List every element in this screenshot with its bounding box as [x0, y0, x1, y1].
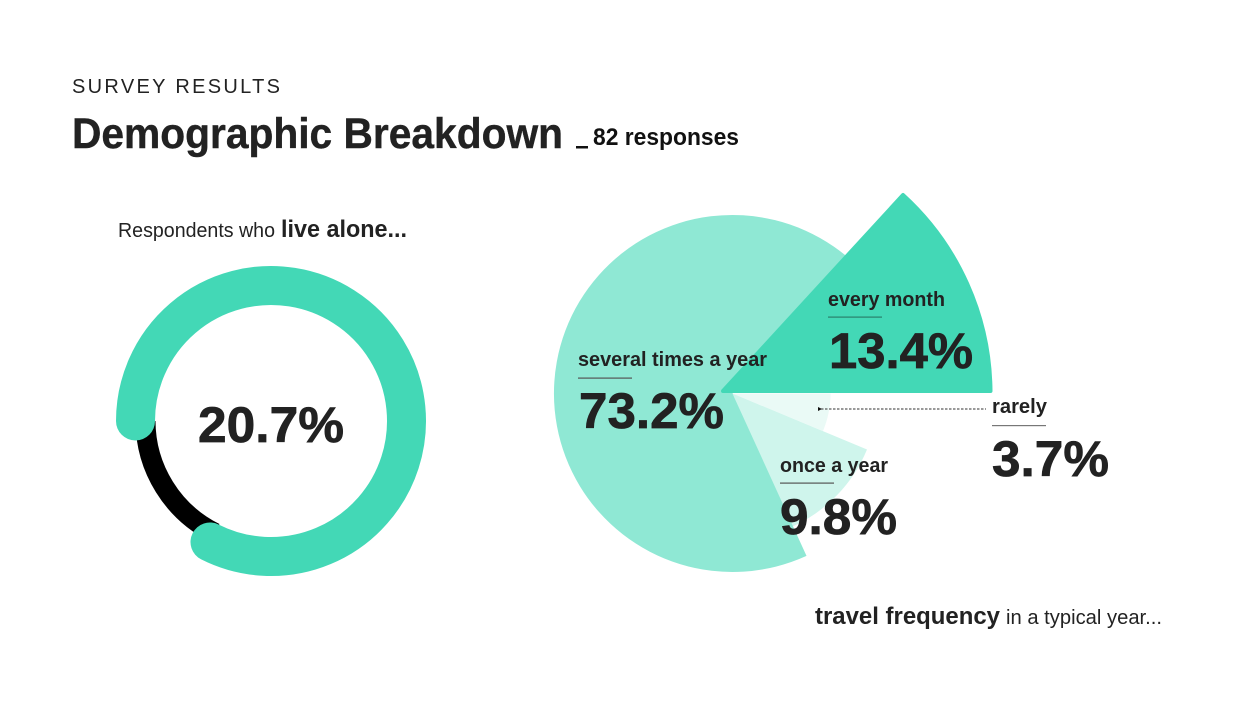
slice: every month — [723, 195, 990, 391]
label: rarely — [992, 396, 1109, 487]
response count: 82 responses — [593, 124, 739, 151]
label: several times a year: several times a year — [578, 349, 767, 371]
donut chart: live alone — [136, 286, 406, 557]
label: every month: every month — [828, 289, 945, 311]
caption: travel frequency: travel frequency — [815, 603, 1001, 630]
label: several times a year: 73.2% — [579, 383, 724, 439]
heading: live alone — [118, 216, 407, 243]
leader line: rarely — [818, 407, 986, 411]
label: once a year — [780, 455, 897, 545]
label: once a year: 9.8% — [780, 489, 897, 545]
caption: travel frequency: in a typical year... — [1006, 607, 1162, 629]
label: every month: 13.4% — [829, 323, 973, 379]
heading: live alone: Respondents who — [118, 220, 275, 242]
heading: live alone: live alone... — [281, 216, 407, 243]
pie chart: travel frequency — [554, 195, 990, 572]
eyebrow: survey results: SURVEY RESULTS — [72, 76, 280, 98]
caption: travel frequency — [815, 603, 1162, 630]
slice: several times a year — [554, 215, 859, 572]
donut value: 20.7% — [198, 397, 344, 453]
slice: once a year — [732, 394, 867, 526]
label: every month — [828, 289, 973, 379]
title: Demographic Breakdown — [72, 110, 563, 158]
label: once a year: once a year — [780, 455, 888, 477]
label: several times a year — [578, 349, 767, 439]
label: rarely: rarely — [992, 396, 1048, 418]
slice: rarely — [732, 394, 830, 431]
label: rarely: 3.7% — [992, 431, 1109, 487]
